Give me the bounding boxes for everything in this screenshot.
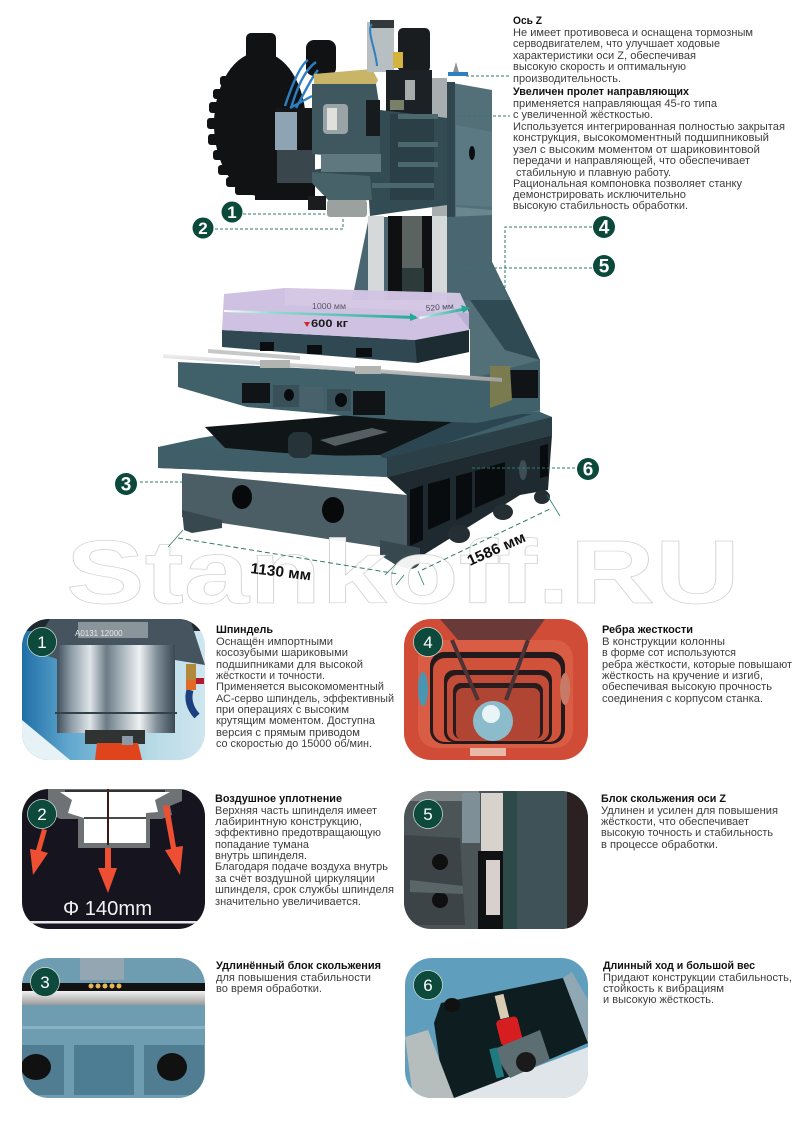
marker 6 bbox=[577, 458, 599, 480]
heading and text: ribs: ребра жёсткости, которые повышают bbox=[602, 659, 792, 671]
heading and text: air seal: попадание тумана bbox=[215, 839, 309, 851]
table bbox=[222, 330, 469, 363]
marker 5: 5 bbox=[599, 256, 610, 278]
badge 2 bbox=[28, 800, 56, 828]
marker 4: 4 bbox=[599, 218, 610, 238]
text block: guide span: Используется интегрированная полностью закрытая bbox=[513, 121, 785, 133]
text block: guide span: демонстрировать исключительно bbox=[513, 189, 686, 201]
text block: Z axis: серводвигателем, что улучшает ходовые bbox=[513, 38, 720, 50]
heading and text: spindle: жёсткости и точности. bbox=[216, 670, 325, 682]
text block: Z axis: характеристики оси Z, обеспечивая bbox=[513, 50, 696, 62]
text block: guide span: с увеличенной жёсткостью. bbox=[513, 109, 653, 121]
top cylinder and motor bbox=[367, 22, 394, 72]
heading and text: spindle: косозубыми шариковыми bbox=[216, 647, 348, 659]
photo panel 6: long travel bbox=[405, 958, 588, 1098]
heading and text: spindle: при операциях с высоким bbox=[216, 704, 349, 716]
text block: Z axis: высокую скорость и оптимальную bbox=[513, 61, 686, 73]
dimension: 1586 mm bbox=[418, 495, 560, 585]
badge 5 bbox=[414, 800, 442, 828]
text block: guide span: Увеличен пролет направляющих bbox=[513, 86, 689, 98]
heading and text: spindle: со скоростью до 15000 об/мин. bbox=[216, 738, 372, 750]
heading and text: long slide block: для повышения стабильности bbox=[216, 972, 371, 984]
photo panel 4: ribs bbox=[404, 619, 588, 760]
heading and text: spindle: АС-серво шпиндель, эффективный bbox=[216, 693, 394, 705]
text block: guide span: Рациональная компоновка позволяет станку bbox=[513, 178, 743, 190]
watermark: Stankoff.RU bbox=[66, 523, 740, 623]
dimension arrows on table bbox=[224, 305, 470, 321]
heading and text: ribs: В конструкции колонны bbox=[602, 636, 725, 648]
heading and text: Z slide block: в процессе обработки. bbox=[601, 839, 718, 851]
heading and text: air seal bbox=[215, 793, 394, 908]
dimension: 1586 mm: 1586 мм bbox=[465, 529, 528, 570]
text block: guide span: высокую стабильность обработки. bbox=[513, 200, 688, 212]
saddle bbox=[178, 360, 540, 423]
marker 3: 3 bbox=[121, 474, 131, 496]
badge 3 bbox=[30, 968, 60, 996]
photo panel 5: Z slide block bbox=[404, 791, 588, 929]
heading and text: air seal: шпинделя, срок службы шпинделя bbox=[215, 884, 394, 896]
workpiece volume bbox=[222, 288, 470, 340]
marker 3 bbox=[115, 473, 137, 496]
label: 600 kg: 600 кг bbox=[311, 318, 348, 330]
marker 4 bbox=[593, 216, 615, 238]
heading and text: spindle: версия с прямым приводом bbox=[216, 727, 360, 739]
heading and text: air seal: Воздушное уплотнение bbox=[215, 793, 342, 805]
text block: Z axis: Не имеет противовеса и оснащена тормозным bbox=[513, 27, 753, 39]
photo panel 2: air seal bbox=[22, 789, 205, 929]
heading and text: ribs bbox=[602, 624, 792, 705]
heading and text: spindle: Шпиндель bbox=[216, 624, 273, 636]
machine illustration bbox=[158, 20, 552, 569]
heading and text: ribs: обеспечивая высокую прочность bbox=[602, 681, 773, 693]
photo panel 1: spindle: A0131 12000 bbox=[75, 629, 123, 638]
badge 1: 1 bbox=[37, 633, 47, 652]
text block: Z axis: производительность. bbox=[513, 73, 621, 85]
heading and text: long travel: стойкость к вибрациям bbox=[603, 983, 724, 995]
heading and text: spindle: Применяется высокомоментный bbox=[216, 681, 384, 693]
label: diameter: Φ 140mm bbox=[63, 898, 152, 920]
dimension: 1130 mm: 1130 мм bbox=[250, 560, 312, 584]
heading and text: long travel bbox=[603, 960, 792, 1006]
badge 3: 3 bbox=[40, 973, 50, 992]
heading and text: spindle: Оснащён импортными bbox=[216, 636, 333, 648]
leader lines bbox=[140, 76, 592, 482]
dimension: 1130 mm bbox=[168, 530, 404, 585]
heading and text: air seal: значительно увеличивается. bbox=[215, 896, 361, 908]
heading and text: ribs: соединения с корпусом станка. bbox=[602, 693, 763, 705]
heading and text: air seal: Верхняя часть шпинделя имеет bbox=[215, 805, 377, 817]
marker 1: 1 bbox=[227, 203, 237, 222]
column bbox=[447, 82, 540, 412]
heading and text: Z slide block: Блок скольжения оси Z bbox=[601, 793, 727, 805]
text block: guide span: конструкция, высокомоментный подшипниковый bbox=[513, 132, 769, 144]
heading and text: long slide block: Удлинённый блок скольжения bbox=[216, 960, 381, 972]
photo panel 1: spindle bbox=[22, 619, 205, 760]
label: 1000 mm: 1000 мм bbox=[312, 302, 346, 311]
heading and text: air seal: Благодаря подаче воздуха внутрь bbox=[215, 861, 388, 873]
tool magazine bbox=[207, 33, 336, 200]
badge 1 bbox=[28, 628, 56, 656]
text block: guide span: передачи и направляющей, что обеспечивает bbox=[513, 155, 750, 167]
marker 5 bbox=[593, 255, 615, 278]
base body bbox=[182, 473, 407, 547]
heading and text: Z slide block: жёсткости, что обеспечивает bbox=[601, 816, 749, 828]
badge 4 bbox=[414, 628, 442, 656]
text block: guide span: применяется направляющая 45-го типа bbox=[513, 98, 717, 110]
heading and text: long slide block: во время обработки. bbox=[216, 983, 322, 995]
heading and text: air seal: эффективно предотвращающую bbox=[215, 827, 381, 839]
heading and text: spindle bbox=[216, 624, 394, 750]
marker 1 bbox=[222, 202, 242, 222]
heading and text: Z slide block bbox=[601, 793, 778, 851]
photo panel 3: slide block bbox=[21, 958, 205, 1098]
badge 5: 5 bbox=[423, 805, 433, 824]
marker 2: 2 bbox=[198, 219, 208, 238]
heading and text: long travel: Придают конструкции стабильность, bbox=[603, 972, 792, 984]
badge 6: 6 bbox=[423, 976, 433, 995]
heading and text: long travel: Длинный ход и большой вес bbox=[603, 960, 755, 972]
head and tubes bbox=[276, 108, 314, 152]
heading and text: air seal: лабиринтную конструкцию, bbox=[215, 816, 362, 828]
text block: guide span bbox=[513, 86, 785, 212]
label: 520 mm: 520 мм bbox=[425, 302, 454, 313]
heading and text: Z slide block: Удлинен и усилен для повышения bbox=[601, 805, 778, 817]
heading and text: air seal: внутрь шпинделя. bbox=[215, 850, 307, 862]
heading and text: ribs: жёсткость на кручение и изгиб, bbox=[602, 670, 763, 682]
ram and ribs bbox=[312, 110, 447, 216]
marker 2 bbox=[192, 218, 214, 238]
heading and text: ribs: Ребра жесткости bbox=[602, 624, 693, 636]
heading and text: ribs: в форме сот используются bbox=[602, 647, 736, 659]
vertical rails and ballscrew bbox=[352, 215, 510, 300]
heading and text: spindle: крутящим моментом. Доступна bbox=[216, 715, 375, 727]
heading and text: long slide block bbox=[216, 960, 381, 995]
badge 4: 4 bbox=[423, 633, 433, 652]
heading and text: air seal: за счёт воздушной циркуляции bbox=[215, 873, 375, 885]
heading and text: Z slide block: высокую точность и стабильность bbox=[601, 827, 773, 839]
marker 6: 6 bbox=[583, 460, 593, 480]
text block: Z axis: Ось Z bbox=[513, 15, 543, 27]
text block: guide span: узел с высоким моментом от шариковинтовой bbox=[513, 144, 760, 156]
heading and text: long travel: и высокую жёсткость. bbox=[603, 994, 714, 1006]
base tray bbox=[158, 412, 552, 477]
heading and text: spindle: подшипниками для высокой bbox=[216, 659, 363, 671]
text block: guide span: стабильную и плавную работу. bbox=[516, 167, 671, 179]
badge 6 bbox=[414, 970, 442, 1000]
text block: Z axis bbox=[513, 15, 753, 85]
badge 2: 2 bbox=[37, 805, 47, 824]
